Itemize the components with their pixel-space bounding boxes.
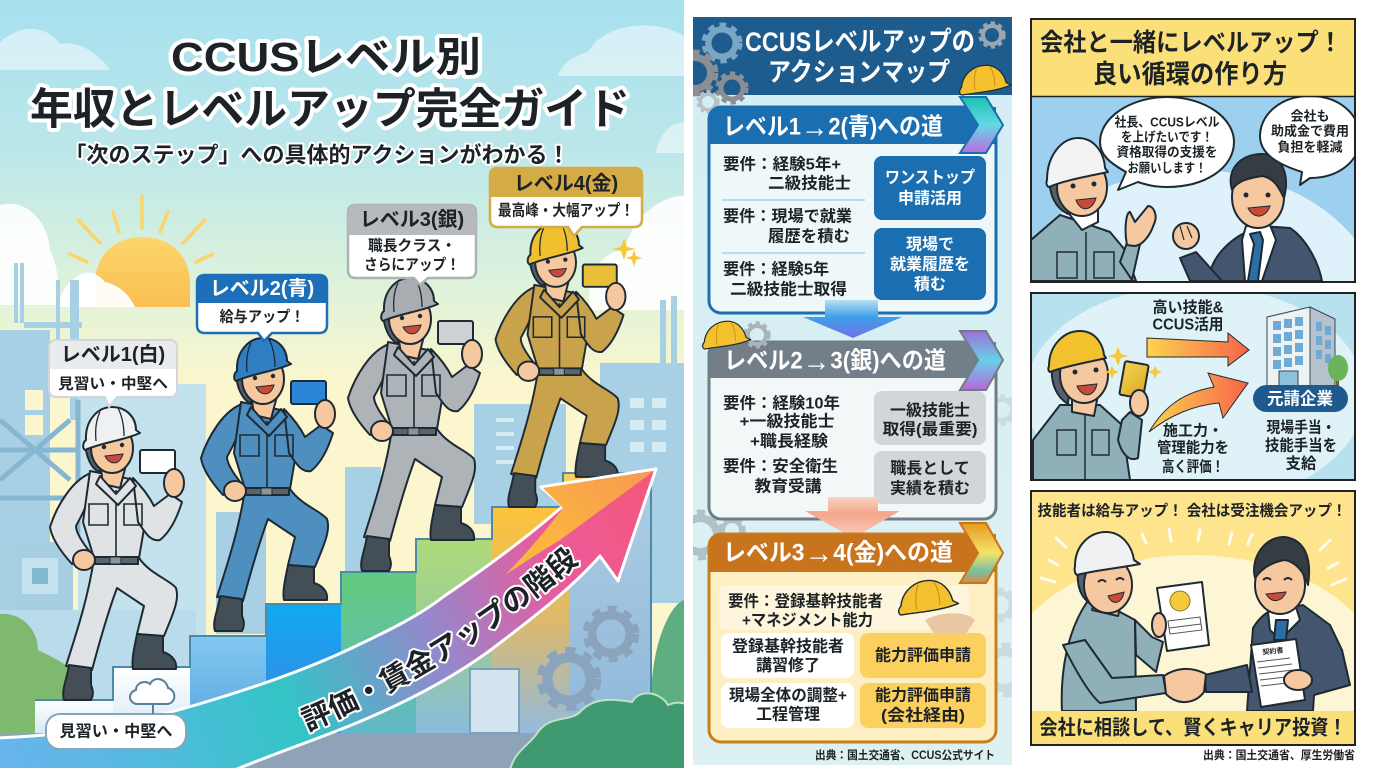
- action: build work history: 就業履歴を: [890, 256, 970, 274]
- right bush back: [652, 600, 684, 704]
- card: level 1 to 2: レベル1→2(青)への道: [723, 110, 943, 144]
- callout: apprentice: [46, 704, 186, 749]
- requirements: +一級技能士: [740, 412, 834, 430]
- icon: helmet: [960, 65, 1011, 95]
- speech bubble manager: 会社も: [1290, 108, 1330, 124]
- action: one-stop application: ワンストップ: [885, 168, 975, 187]
- step: company application: [860, 683, 986, 728]
- background gears: [678, 396, 1029, 694]
- step: training: 登録基幹技能者: [732, 636, 844, 656]
- arrow down blue: [803, 300, 902, 338]
- requirements: [728, 592, 883, 630]
- label evaluation: 施工力・: [1163, 422, 1223, 440]
- requirements: 教育受講: [754, 476, 822, 496]
- requirements: [723, 394, 840, 496]
- light dome: [1003, 555, 1376, 768]
- comic 3 bottom caption: 会社に相談して、賢くキャリア投資！: [1040, 716, 1346, 740]
- panel: company comic 1: [1005, 19, 1376, 470]
- comic 3 top caption: 技能者は給与アップ！ 会社は受注機会アップ！: [1038, 502, 1346, 520]
- icon: contractor building: [1267, 307, 1348, 386]
- callout: level 2: 給与アップ！: [220, 308, 304, 326]
- icon: sun: [58, 196, 213, 307]
- arrow label: 評価・賃金アップの階段: [298, 544, 581, 735]
- requirements: 要件：経験10年: [723, 394, 840, 412]
- card: level 3 to 4: [709, 523, 1003, 742]
- worker level 2: [201, 338, 335, 631]
- step: company application: (会社経由): [881, 706, 965, 724]
- rays: [1041, 529, 1346, 585]
- requirements: 要件：現場で就業: [723, 208, 852, 226]
- comic sky: [1031, 97, 1355, 281]
- action map header: [675, 17, 1012, 112]
- icon: cloud on step: [130, 679, 174, 704]
- callout: level 1: 見習い・中堅へ: [58, 376, 168, 392]
- speech bubble worker: を上げたいです！: [1121, 130, 1213, 144]
- action: foreman record: [874, 451, 986, 504]
- big rising arrow: [0, 468, 658, 768]
- step: ability evaluation: [860, 633, 986, 678]
- arrow down peach: [805, 497, 900, 538]
- worker level 1: [50, 407, 184, 700]
- action: foreman record: 実績を積む: [890, 480, 970, 498]
- requirements: +マネジメント能力: [742, 610, 873, 630]
- step: ability evaluation: 能力評価申請: [875, 646, 971, 664]
- card: level 1 to 2: [709, 97, 1003, 313]
- speech bubble worker: 資格取得の支援を: [1116, 144, 1218, 160]
- step: site coordination: [721, 683, 854, 728]
- callout: apprentice: 見習い・中堅へ: [60, 722, 172, 740]
- header gears: [675, 23, 1004, 112]
- card: level 3 to 4: レベル3→4(金)への道: [723, 536, 953, 570]
- title: CCUSレベル別: [171, 34, 481, 80]
- source note: 出典：国土交通省、CCUS公式サイト: [815, 748, 995, 762]
- action: one-stop application: 申請活用: [898, 190, 962, 208]
- requirements: 履歴を積む: [768, 228, 850, 246]
- comic 1 title band: [1031, 19, 1355, 96]
- step: company application: 能力評価申請: [875, 686, 971, 704]
- callout: level 1: [49, 340, 177, 407]
- requirements: 要件：経験5年+: [723, 154, 841, 174]
- callout: level 4: レベル4(金): [514, 172, 618, 195]
- requirements: 二級技能士取得: [730, 280, 847, 298]
- requirements: +職長経験: [750, 432, 828, 450]
- worker with gold card: [1033, 331, 1162, 480]
- panel: company comic 2: [1025, 285, 1365, 505]
- speech bubble worker: 社長、CCUSレベル: [1114, 114, 1220, 130]
- chevron: [960, 331, 1003, 390]
- comic 1 title band: 会社と一緒にレベルアップ！: [1040, 29, 1342, 57]
- requirements: 二級技能士: [768, 174, 851, 192]
- callout: level 2: [197, 275, 327, 341]
- callout: level 4: 最高峰・大幅アップ！: [498, 202, 634, 220]
- left bush: [0, 614, 68, 733]
- label allowance: 支給: [1285, 454, 1317, 472]
- title: [30, 34, 630, 134]
- staircase: [35, 473, 651, 733]
- label skill: CCUS活用: [1152, 316, 1224, 334]
- label skill: 高い技能&: [1152, 298, 1224, 316]
- background buildings and scaffolding: [0, 263, 684, 710]
- manager talking: [1173, 154, 1322, 281]
- gears: [541, 609, 636, 707]
- action: build work history: 積む: [914, 276, 946, 294]
- action: first class skill: [874, 391, 986, 445]
- speech bubble manager: 負担を軽減: [1277, 140, 1343, 154]
- step: training: 講習修了: [756, 656, 820, 674]
- step: training: [721, 633, 854, 678]
- callout: level 1: レベル1(白): [61, 343, 165, 366]
- helmet and gear: [899, 580, 975, 635]
- action: first class skill: 一級技能士: [890, 400, 970, 420]
- requirements: [723, 154, 852, 298]
- action: first class skill: 取得(最重要): [882, 420, 978, 438]
- door: [470, 669, 519, 733]
- card: level 2 to 3: [709, 331, 1003, 519]
- sparkles: [1105, 347, 1162, 379]
- card: level 2 to 3: レベル2→3(銀)への道: [724, 344, 946, 378]
- requirements: 要件：経験5年: [723, 260, 829, 278]
- light circle: [1025, 285, 1365, 505]
- action map header: アクションマップ: [768, 57, 950, 87]
- speech bubble manager: [1260, 96, 1360, 185]
- source note right: 出典：国土交通省、厚生労働省: [1203, 748, 1355, 762]
- label evaluation: 高く評価！: [1162, 458, 1224, 476]
- speech bubble worker: [1100, 97, 1234, 190]
- title: 年収とレベルアップ完全ガイド: [30, 86, 630, 134]
- callout: level 3: レベル3(銀): [360, 208, 464, 231]
- label allowance: [1265, 418, 1337, 472]
- sparkles: [612, 238, 642, 267]
- requirements: 要件：登録基幹技能者: [728, 592, 883, 610]
- requirements: 要件：安全衛生: [723, 456, 838, 476]
- callout: level 2: レベル2(青): [210, 277, 314, 300]
- comic 1 title band: 良い循環の作り方: [1093, 59, 1287, 89]
- contractor pill: 元請企業: [1267, 388, 1333, 408]
- worker level 4: [496, 223, 625, 507]
- callout: level 3: 職長クラス・: [368, 238, 456, 254]
- light dome: [1005, 170, 1376, 470]
- front bush: [510, 693, 686, 768]
- action: build work history: 現場で: [906, 236, 954, 254]
- callout: level 3: [348, 205, 476, 285]
- sky background: [0, 0, 684, 679]
- speech bubble worker: お願いします！: [1128, 160, 1206, 176]
- arrow evaluation to contractor: [1149, 373, 1248, 432]
- icon: handshake: [1164, 669, 1206, 702]
- step: site coordination: 現場全体の調整+: [729, 686, 847, 704]
- worker talking: [1031, 138, 1156, 281]
- document smiley: [1152, 582, 1209, 651]
- contract document: 契約書: [1262, 645, 1284, 657]
- contractor pill: [1253, 385, 1348, 412]
- step: site coordination: 工程管理: [756, 704, 820, 724]
- callout: level 3: さらにアップ！: [364, 256, 460, 274]
- chevron: [960, 523, 1003, 583]
- ground: [0, 733, 536, 768]
- manager handshake: [1205, 537, 1350, 711]
- arrow skill to contractor: [1147, 333, 1249, 366]
- panel: level staircase infographic: [0, 0, 684, 768]
- helmet and gear left of card two: [703, 321, 769, 349]
- label evaluation: [1157, 422, 1229, 476]
- subtitle: 「次のステップ」への具体的アクションがわかる！: [64, 142, 570, 168]
- label evaluation: 管理能力を: [1157, 438, 1229, 456]
- label skill: [1152, 298, 1224, 334]
- chevron: [960, 97, 1003, 153]
- comic 3 bottom caption: [1031, 711, 1355, 745]
- worker handshake: [1062, 532, 1166, 711]
- speech bubble manager: 助成金で費用: [1271, 124, 1349, 138]
- action: one-stop application: [874, 156, 986, 220]
- callout: level 4: [490, 168, 642, 236]
- worker level 3: [348, 278, 482, 571]
- action map header: CCUSレベルアップの: [745, 27, 975, 57]
- panel: company comic 3: [1003, 491, 1376, 768]
- label allowance: 技能手当を: [1265, 436, 1337, 454]
- action map background: [693, 95, 1012, 765]
- action: build work history: [874, 228, 986, 300]
- clouds: [0, 25, 684, 310]
- contract document: [1251, 639, 1312, 707]
- panel: action map: [675, 17, 1029, 765]
- action: foreman record: 職長として: [890, 460, 970, 478]
- label allowance: 現場手当・: [1266, 418, 1336, 436]
